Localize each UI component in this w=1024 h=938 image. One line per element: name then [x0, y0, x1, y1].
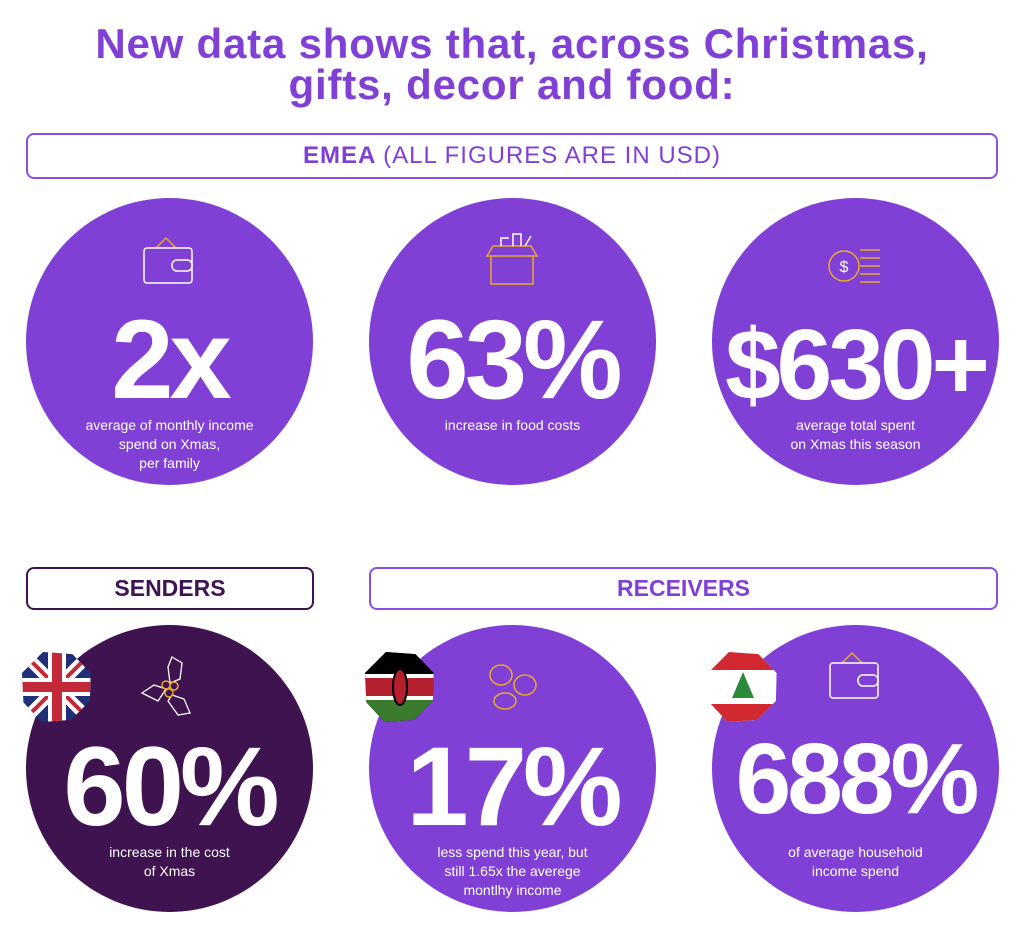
header: RECEIVERS: RECEIVERS [617, 575, 750, 601]
caption [109, 844, 230, 879]
title: New data shows that, across Christmas, [95, 20, 929, 67]
big number: 2x [111, 297, 228, 422]
panel: 688% [712, 625, 999, 912]
caption [85, 417, 254, 471]
panel: 60% [26, 625, 313, 912]
header: RECEIVERS [369, 567, 998, 610]
header: EMEA [26, 133, 998, 179]
icon: holly [140, 656, 191, 716]
header: EMEA: EMEA (ALL FIGURES ARE IN USD) [303, 142, 721, 169]
panel: 2x [26, 198, 313, 485]
flag: UK [22, 652, 92, 722]
big number: $630+ [725, 309, 986, 421]
icon: coins [828, 249, 880, 283]
big number: 17% [406, 724, 619, 849]
icon: grocery box [486, 233, 538, 285]
caption: of average household [788, 844, 923, 860]
icon: coins [489, 664, 537, 710]
caption [788, 844, 923, 879]
big number: 688% [736, 723, 975, 835]
title [95, 20, 929, 108]
caption: average total spent [796, 417, 915, 433]
caption: of Xmas [144, 863, 195, 879]
flag: Lebanon [708, 652, 778, 722]
panel: $630+ [712, 198, 999, 485]
caption: still 1.65x the averege [444, 863, 581, 879]
icon: coins: $ [840, 259, 849, 276]
panel: 63% [369, 198, 656, 485]
caption: less spend this year, but [437, 844, 588, 860]
caption: increase in food costs [445, 417, 580, 433]
caption: montlhy income [463, 882, 562, 898]
caption [791, 417, 920, 452]
caption: income spend [812, 863, 899, 879]
panel: 17% [369, 625, 656, 912]
flag: Kenya [365, 652, 435, 722]
big number: 63% [406, 297, 619, 422]
caption: per family [139, 455, 200, 471]
caption: on Xmas this season [791, 436, 920, 452]
caption: average of monthly income spend on Xmas, [85, 417, 254, 452]
header: SENDERS: SENDERS [114, 575, 226, 601]
header: SENDERS [26, 567, 314, 610]
caption: increase in the cost [109, 844, 230, 860]
title: gifts, decor and food: [289, 61, 735, 108]
icon: wallet [143, 237, 193, 284]
caption [437, 844, 588, 898]
icon: wallet [829, 652, 879, 699]
big number: 60% [63, 724, 276, 849]
